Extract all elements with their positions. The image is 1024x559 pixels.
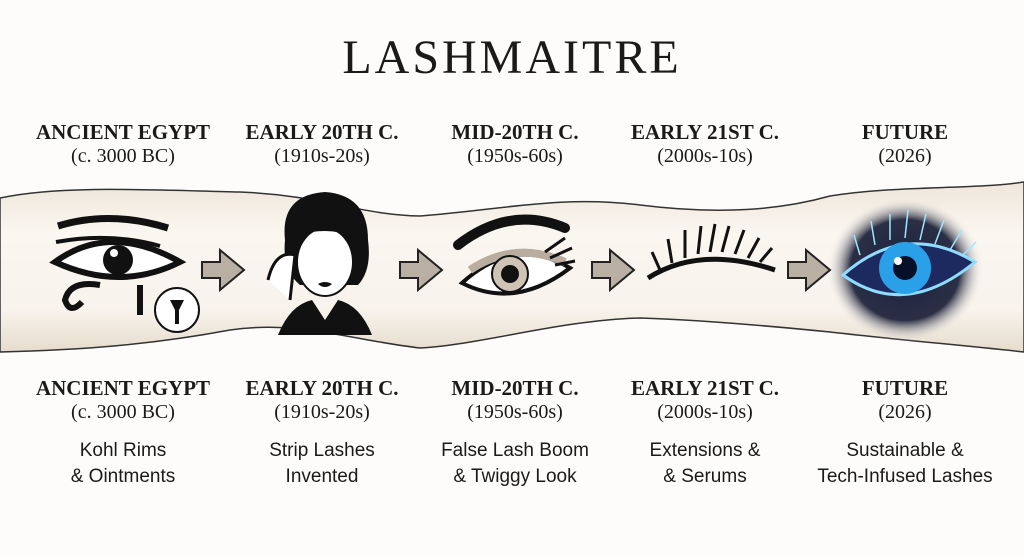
text: Sustainable & [846, 440, 964, 461]
text: False Lash Boom [441, 440, 589, 461]
text: & Twiggy Look [453, 466, 577, 487]
text: (c. 3000 BC) [71, 401, 175, 423]
text: MID-20TH C. [451, 120, 579, 144]
text: FUTURE [862, 376, 948, 400]
text: & Ointments [71, 466, 175, 487]
text: EARLY 20TH C. [245, 376, 399, 400]
text: FUTURE [862, 120, 948, 144]
bottom labels [36, 376, 993, 487]
text: (2000s-10s) [657, 145, 753, 167]
text: (2026) [878, 145, 932, 167]
text: MID-20TH C. [451, 376, 579, 400]
arrows [202, 250, 830, 290]
text: EARLY 21ST C. [631, 376, 779, 400]
text: EARLY 21ST C. [631, 120, 779, 144]
text: Tech-Infused Lashes [817, 466, 993, 487]
icon: 1920s woman [268, 192, 372, 335]
title: LASHMAITRE [342, 31, 682, 84]
text: Kohl Rims [80, 440, 166, 461]
text: Invented [286, 466, 358, 487]
text: EARLY 20TH C. [245, 120, 399, 144]
text: Extensions & [650, 440, 760, 461]
text: (c. 3000 BC) [71, 145, 175, 167]
text: (1910s-20s) [274, 145, 370, 167]
text: Strip Lashes [269, 440, 375, 461]
icon: strip lash [648, 224, 775, 278]
text: ANCIENT EGYPT [36, 120, 210, 144]
text: ANCIENT EGYPT [36, 376, 210, 400]
top labels [36, 120, 948, 167]
icon: futuristic eye [827, 198, 983, 342]
icon: eye of horus [55, 218, 199, 332]
text: (2000s-10s) [657, 401, 753, 423]
text: (1950s-60s) [467, 401, 563, 423]
text: (1950s-60s) [467, 145, 563, 167]
text: (2026) [878, 401, 932, 423]
icon: mid-century eye [458, 220, 575, 294]
text: & Serums [663, 466, 747, 487]
text: (1910s-20s) [274, 401, 370, 423]
